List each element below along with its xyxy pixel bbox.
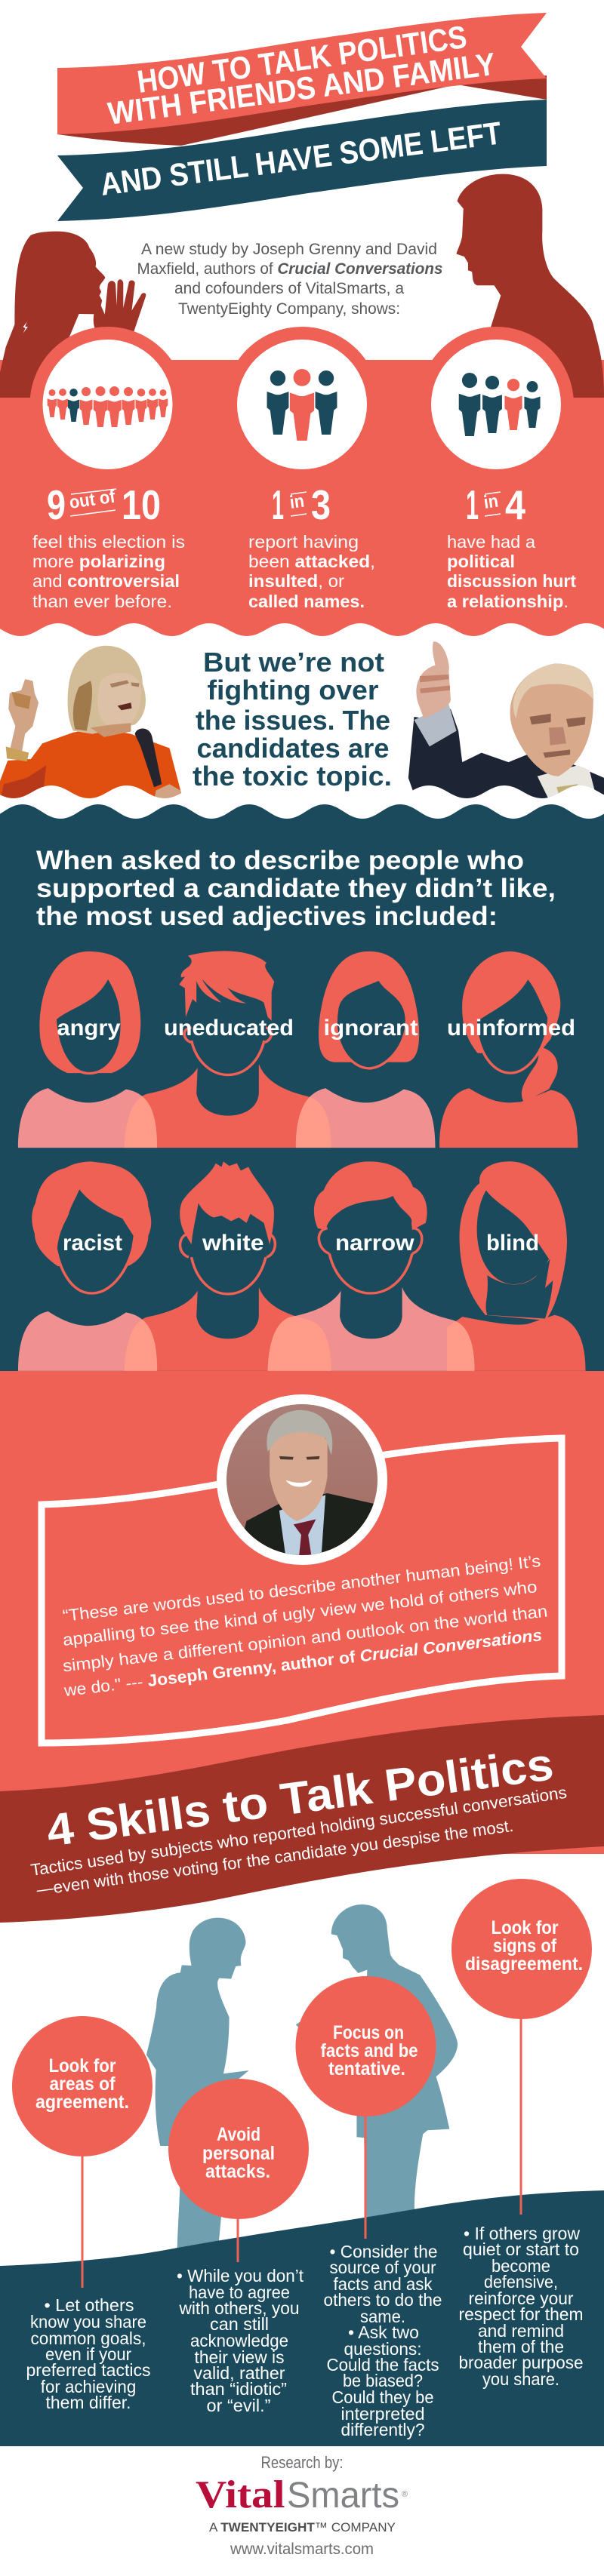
intro text: TwentyEighty Company, shows: [178,300,400,318]
adjective labels: white [202,1231,264,1256]
skill 4 balloon: signs of [493,1935,557,1957]
stat circle 3: one of four [418,327,574,482]
tip text 2: valid, rather [193,2363,285,2383]
intro text [137,241,442,318]
skill 1 balloon: Look for [48,2055,116,2076]
intro text: A new study by Joseph Grenny and David [141,241,437,258]
tip text 1: common goals, [30,2329,146,2348]
stat: 9 out of 10: 10 [122,481,161,528]
title line 1: HOW TO TALK POLITICS [135,19,469,100]
tip text 1: them differ. [45,2393,131,2412]
skill 2 balloon: personal [202,2143,275,2164]
tip text 4 [459,2224,583,2389]
heading: not fighting over issues [193,647,392,792]
portrait: Donald Trump [408,641,604,800]
heading: 4 skills: 4 Skills to Talk Politics [44,1738,556,1856]
banner: red ribbon [57,13,547,134]
stat text 2: called names. [248,592,365,611]
tip text 2: than “idiotic” [190,2379,287,2399]
tip text 4: • If others grow [464,2224,580,2243]
tip text 4: respect for them [459,2304,583,2324]
stat: 9 out of 10 [47,481,161,528]
title banners [57,13,547,221]
stat text 1 [32,532,185,611]
heading: not fighting over issues: candidates are [196,733,390,764]
heading: adjectives: the most used adjectives included: [36,902,498,931]
heading: adjectives: When asked to describe people who [36,846,524,875]
red quote panel [0,1371,604,1854]
adjective labels: narrow [335,1231,414,1256]
tip text 2: with others, you [179,2298,299,2318]
adjective labels: blind [486,1231,539,1256]
stat: 9 out of 10: 9 [47,481,66,528]
tip text 3: • Ask two [348,2322,419,2342]
head: uneducated [179,951,274,1075]
intro text: Maxfield, authors of Crucial Conversations [137,260,442,278]
silhouette: whispering woman [0,232,146,398]
stat text 2 [248,532,375,611]
logo: VitalSmarts: Vital [196,2473,285,2516]
tip text 3: same. [360,2307,405,2326]
tip text 3: Could the facts [326,2355,439,2375]
heading: adjectives: supported a candidate they didn’t like, [36,874,556,903]
tip text 2: have to agree [189,2282,290,2302]
stat: 1 in 3: 3 [311,481,331,528]
stat: 1 in 3: 1 [272,481,284,528]
skill 3 balloon [296,1976,436,2239]
adjective labels: racist [63,1231,122,1256]
adjective labels [57,1016,575,1256]
tip text 2: their view is [195,2347,284,2367]
tip text 3: interpreted [341,2404,424,2424]
heading: adjectives [36,846,556,931]
logo: VitalSmarts [196,2473,408,2516]
skill 4 balloon [451,1879,592,2215]
stat: 1 in 4: 1 [466,481,479,528]
stat text 2: report having [248,532,359,552]
tip text 4: them of the [478,2337,564,2356]
tip text 1: know you share [30,2312,146,2332]
tip text 2: can still [210,2314,269,2334]
tip text 4: quiet or start to [463,2239,579,2259]
stat: 9 out of 10: out of [68,487,117,513]
stat text 1: more polarizing [32,552,165,571]
stat text 3: a relationship. [447,592,569,611]
stat text 3 [447,532,576,611]
skill 1 balloon: agreement. [35,2092,129,2113]
tip text 3: others to do the [323,2290,442,2310]
adjective labels: uninformed [447,1016,575,1041]
adjective labels: angry [57,1016,121,1041]
tip text 3: differently? [341,2420,424,2439]
tagline: A TWENTYEIGHT™ COMPANY [209,2520,396,2535]
head: uninformed [462,951,560,1102]
skill 4 balloon: disagreement. [465,1954,583,1975]
skill 4 balloon: Look for [491,1917,559,1938]
red stats band [0,360,604,636]
stat circle 2: one of three [224,327,380,482]
adjective labels: ignorant [323,1016,418,1041]
silhouettes: two people talking [146,1904,458,2249]
stat text 3: discussion hurt [447,571,576,591]
tip text 1 [26,2295,151,2412]
tip text 2 [177,2266,304,2415]
stat: 1 in 4 [466,481,525,528]
skill 2 balloon [168,2079,309,2262]
tip text 3: • Consider the [329,2242,438,2261]
stat: 1 in 3 [272,481,331,528]
skill 3 balloon: facts and be [320,2040,418,2061]
icon: four people [459,373,541,436]
teal tips panel [0,2190,604,2446]
tip text 1: • Let others [44,2295,134,2315]
logo: VitalSmarts: Smarts [287,2476,399,2516]
skill 2 balloon: Avoid [217,2124,260,2145]
quote text: appalling to see the kind of ugly view we hold of others who [62,1577,538,1649]
title line 3: AND STILL HAVE SOME LEFT [98,115,504,202]
tip text 3: facts and ask [334,2274,433,2294]
head: narrow [314,1161,427,1293]
stat: 1 in 3: in [288,491,306,513]
people row 2 [18,1161,586,1371]
heading: not fighting over issues: the issues. The [196,705,390,736]
head: ignorant [319,951,419,1068]
intro text: and cofounders of VitalSmarts, a [174,280,404,297]
tip text 2: acknowledge [190,2331,288,2350]
stat text 3: have had a [447,532,535,552]
tip text 4: defensive, [484,2272,558,2292]
head: angry [39,951,140,1074]
teal adjectives panel [0,804,604,1371]
tip text 4: become [492,2256,550,2276]
skill 3 balloon: Focus on [333,2022,404,2043]
stat: 1 in 4: 4 [505,481,525,528]
skill 2 balloon: attacks. [205,2161,270,2182]
portrait: Joseph Grenny [217,1394,387,1580]
skill 1 balloon: areas of [50,2073,116,2095]
stat: 1 in 4: in [482,491,500,513]
adjective labels: uneducated [164,1016,294,1041]
quote text: simply have a different opinion and outlook on the world than [62,1601,548,1675]
skills subtitle: —even with those voting for the candidate you despise the most. [35,1816,514,1899]
tip text 1: preferred tactics [26,2360,151,2380]
tip text 2: or “evil.” [207,2396,270,2415]
people row 1 [18,951,578,1148]
stat text 2: insulted, or [248,571,344,591]
icon: three people [267,369,337,441]
stat text 1: feel this election is [32,532,185,552]
logo: VitalSmarts: ® [402,2490,408,2499]
stat circle 1: nine of ten [30,327,186,482]
quote text: we do." --- Joseph Grenny, author of Crucial Conversations [63,1625,543,1700]
tip text 2: • While you don’t [177,2266,304,2286]
tip text 4: and remind [478,2321,564,2341]
stat text 3: political [447,552,515,571]
tip text 3 [323,2242,442,2439]
silhouette: listening man [457,174,604,398]
heading: not fighting over issues: But we’re not [203,647,384,678]
portrait: Hillary Clinton [0,646,183,800]
heading: not fighting over issues: the toxic topic. [193,761,392,792]
head: racist [32,1161,151,1293]
website: www.vitalsmarts.com [230,2541,374,2558]
stat text 1: than ever before. [32,592,172,611]
quote text [62,1551,548,1700]
white wave under portraits [0,785,604,822]
tip text 1: even if your [45,2344,131,2364]
title line 2: WITH FRIENDS AND FAMILY [106,46,498,131]
tip text 4: reinforce your [468,2289,574,2308]
tip text 4: broader purpose [459,2353,583,2372]
dark red skills banner [0,1715,604,1923]
banner: teal ribbon [57,100,547,221]
head: white [180,1161,275,1294]
icon: row of ten people [48,386,168,427]
skill 1 balloon [12,2016,153,2288]
tip text 4: you share. [482,2369,559,2389]
quote frame [42,1438,562,1743]
tip text 3: be biased? [343,2371,423,2390]
heading: not fighting over issues: fighting over [207,675,379,705]
tip text 3: questions: [344,2339,421,2359]
quote text: “These are words used to describe another human being! It’s [62,1551,541,1625]
stat text 1: and controversial [32,571,180,591]
skills subtitle: Tactics used by subjects who reported holding successful conversations [29,1783,568,1880]
tip text 3: Could they be [332,2387,433,2407]
skill 3 balloon: tentative. [328,2058,405,2080]
tip text 1: for achieving [41,2377,136,2396]
head: blind [460,1161,567,1320]
tip text 3: source of your [329,2258,436,2277]
stat text 2: been attacked , [248,552,375,571]
footer credit: Research by: [261,2453,343,2472]
